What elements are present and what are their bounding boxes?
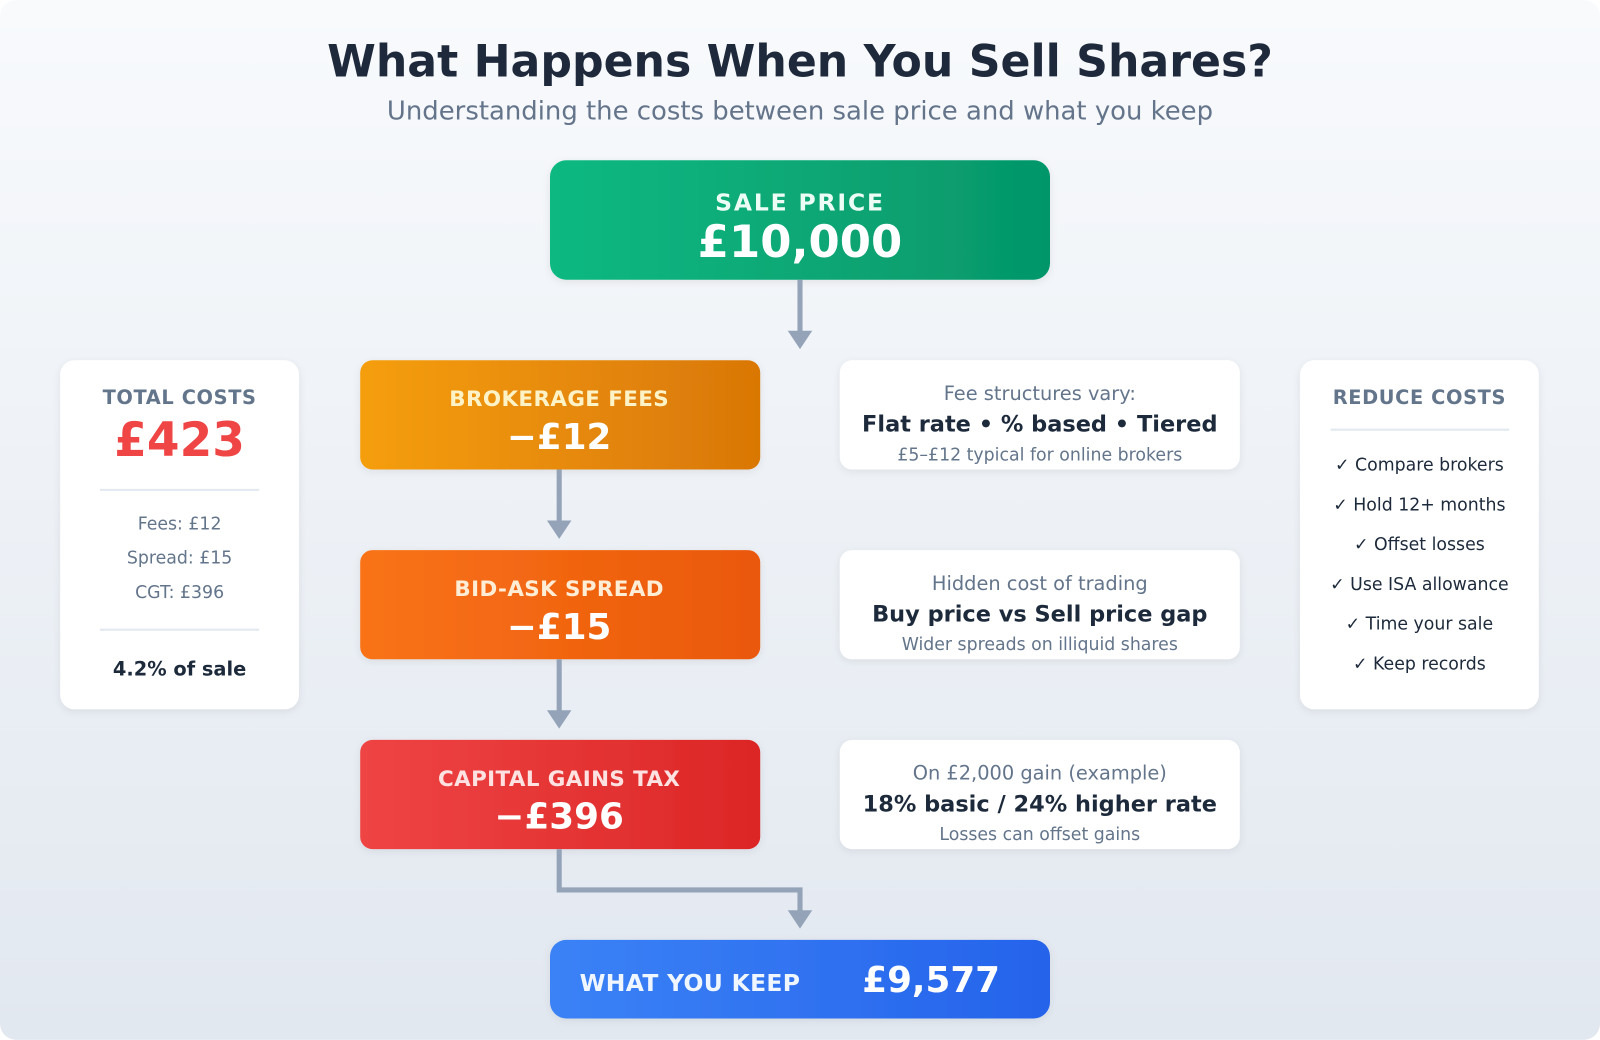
panel: total costs: Fees: £12	[138, 515, 221, 535]
info: fee structures	[840, 360, 1240, 469]
box: what you keep: WHAT YOU KEEP	[580, 969, 800, 997]
panel: reduce costs	[1300, 360, 1539, 709]
info: cgt example: Losses can offset gains	[939, 825, 1140, 845]
box: capital gains tax: CAPITAL GAINS TAX	[438, 767, 680, 792]
box: brokerage fees: −£12	[507, 417, 611, 458]
panel: reduce costs: ✓ Time your sale	[1346, 615, 1493, 635]
panel: total costs: £423	[114, 413, 245, 468]
info: fee structures: Fee structures vary:	[944, 382, 1136, 405]
subtitle: Understanding the costs between sale price and what you keep	[387, 96, 1213, 126]
info: cgt example: On £2,000 gain (example)	[913, 762, 1167, 785]
panel: total costs: Spread: £15	[127, 548, 232, 568]
panel: total costs: 4.2% of sale	[113, 658, 246, 681]
title: What Happens When You Sell Shares?	[327, 37, 1273, 88]
info: hidden cost	[840, 550, 1240, 659]
panel: reduce costs: ✓ Keep records	[1353, 654, 1486, 674]
panel: reduce costs: REDUCE COSTS	[1333, 386, 1506, 409]
panel: total costs	[60, 360, 299, 709]
box: brokerage fees	[360, 360, 760, 469]
arrow: cgt to keep	[559, 849, 812, 929]
arrow: brokerage to spread	[547, 469, 571, 539]
panel: reduce costs: ✓ Compare brokers	[1335, 456, 1504, 476]
panel: total costs: CGT: £396	[135, 583, 224, 603]
panel: reduce costs: ✓ Offset losses	[1354, 535, 1485, 555]
box: what you keep	[550, 940, 1050, 1018]
box: bid-ask spread	[360, 550, 760, 659]
box: what you keep: £9,577	[862, 960, 1000, 1001]
panel: reduce costs: ✓ Hold 12+ months	[1333, 495, 1506, 515]
info: hidden cost: Hidden cost of trading	[932, 572, 1148, 595]
box: bid-ask spread: −£15	[507, 607, 611, 648]
info: fee structures: £5–£12 typical for online brokers	[897, 445, 1182, 465]
box: sale price: SALE PRICE	[715, 188, 885, 216]
box: capital gains tax: −£396	[495, 797, 624, 838]
box: sale price: £10,000	[698, 215, 902, 268]
box: brokerage fees: BROKERAGE FEES	[449, 387, 669, 412]
info: fee structures: Flat rate • % based • Tiered	[862, 412, 1218, 438]
info: cgt example: 18% basic / 24% higher rate	[863, 791, 1217, 817]
panel: reduce costs: ✓ Use ISA allowance	[1330, 575, 1509, 595]
box: bid-ask spread: BID-ASK SPREAD	[454, 577, 664, 602]
arrow: spread to cgt	[547, 659, 571, 729]
box: capital gains tax	[360, 740, 760, 849]
arrow: sale to brokerage	[788, 280, 812, 349]
panel: total costs: TOTAL COSTS	[103, 386, 257, 409]
info: cgt example	[840, 740, 1240, 849]
info: hidden cost: Wider spreads on illiquid shares	[902, 635, 1178, 655]
box: sale price	[550, 160, 1050, 280]
info: hidden cost: Buy price vs Sell price gap	[872, 602, 1208, 628]
